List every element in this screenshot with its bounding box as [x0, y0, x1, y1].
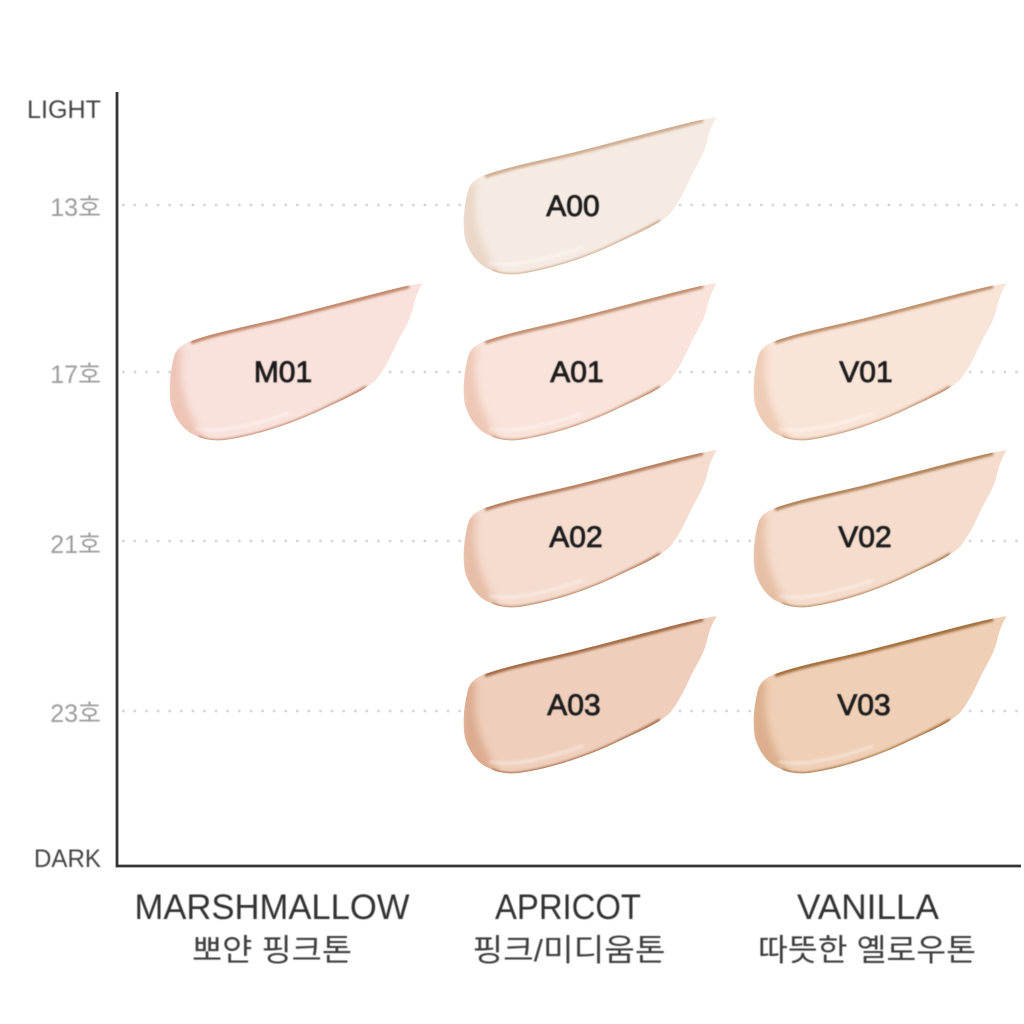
swatch: A03: [459, 616, 717, 778]
column label: Marshmallow: 뽀얀 핑크톤: [192, 933, 352, 968]
swatch: V03: [749, 616, 1007, 778]
dotted guide lines: [122, 205, 1020, 711]
y axis labels: [27, 96, 101, 873]
label: 23호: 23호: [50, 700, 101, 728]
swatch: M01: M01: [254, 356, 312, 389]
swatch: A02: [459, 450, 717, 612]
swatch: A00: A00: [546, 190, 600, 223]
column label: Vanilla: VANILLA: [797, 888, 940, 927]
column label: Marshmallow: [134, 888, 410, 968]
swatch: M01: [165, 283, 423, 445]
column label: Apricot: APRICOT: [495, 888, 641, 927]
swatch: V02: V02: [838, 521, 892, 554]
label: dark: DARK: [34, 845, 101, 873]
label: 17호: 17호: [50, 361, 101, 389]
column label: Marshmallow: MARSHMALLOW: [134, 888, 410, 927]
swatch: V02: [749, 450, 1007, 612]
swatch: A01: [459, 283, 717, 445]
label: 13호: 13호: [50, 194, 101, 222]
chart axes: [117, 92, 1021, 866]
column label: Apricot: 핑크/미디움톤: [472, 933, 666, 968]
swatch: V01: [749, 283, 1007, 445]
swatch: A03: A03: [547, 689, 601, 722]
label: light: LIGHT: [27, 96, 101, 124]
column label: Vanilla: 따뜻한 옐로우톤: [758, 933, 976, 968]
swatch: A00: [459, 117, 717, 279]
swatch: V03: V03: [837, 689, 891, 722]
column label: Apricot: [472, 888, 666, 968]
column label: Vanilla: [758, 888, 976, 968]
label: 21호: 21호: [50, 531, 101, 559]
swatch: A01: A01: [550, 356, 604, 389]
swatch: V01: V01: [839, 356, 893, 389]
swatch: A02: A02: [549, 521, 603, 554]
